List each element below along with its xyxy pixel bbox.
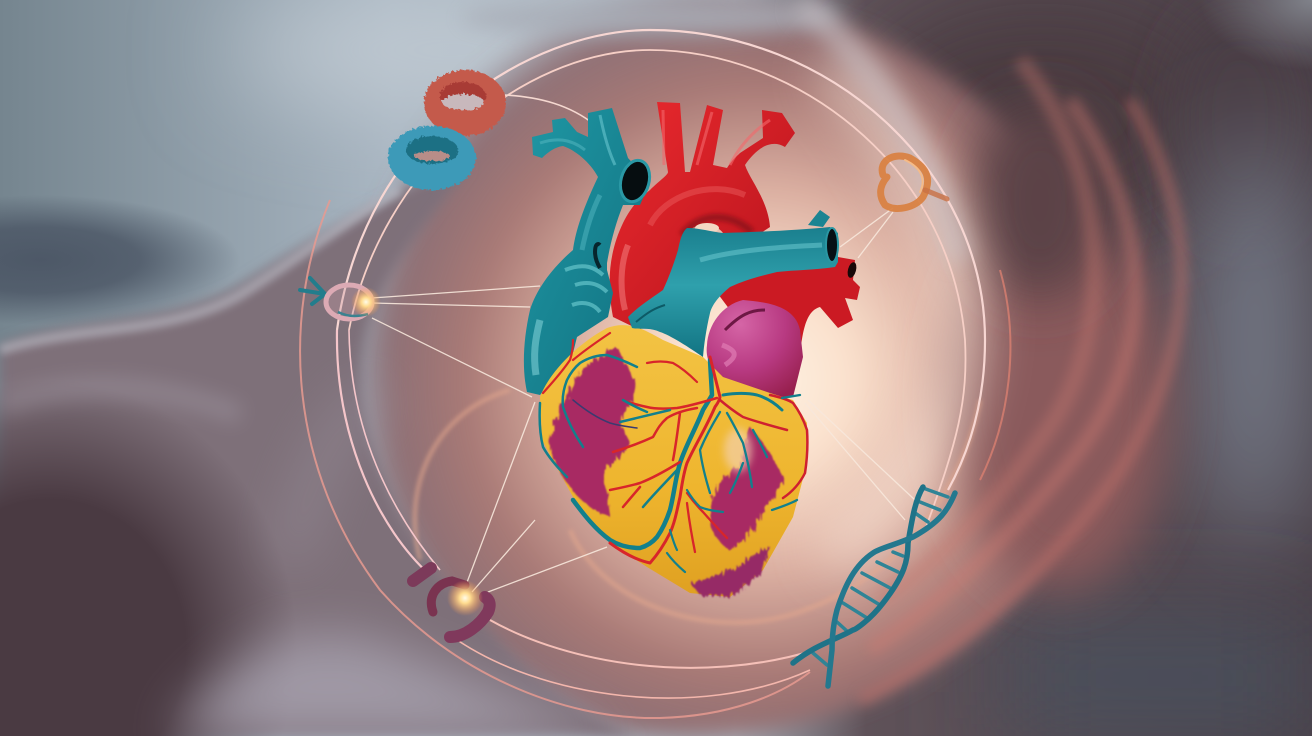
- icon: DNA helix: [793, 487, 955, 686]
- swirl lines around heart: [415, 390, 980, 622]
- heart: superior vessels and right atrium teal: [524, 108, 654, 395]
- icon: orange ribbon molecule: [881, 156, 947, 208]
- central warm glow: [270, 0, 1110, 736]
- heart: pulmonary artery teal: [628, 210, 838, 357]
- heart: right red vessels: [715, 257, 860, 357]
- heart: coronary vessels: [540, 333, 807, 572]
- icon: red fuzzy ring: [424, 70, 506, 136]
- icon: blue fuzzy ring: [388, 126, 476, 190]
- icon: left ring molecule with spark: [300, 278, 381, 319]
- connector lines: [372, 208, 915, 595]
- heart: magenta patches: [550, 347, 783, 597]
- heart: ventricles yellow: [540, 325, 807, 597]
- foreground tissue fold: [0, 165, 640, 736]
- heart: [524, 102, 860, 597]
- icon: lower purple molecule with spark: [413, 568, 490, 637]
- orbit rings: [300, 30, 1010, 718]
- heart: magenta atrium: [707, 300, 803, 397]
- heart: aorta red: [610, 102, 795, 330]
